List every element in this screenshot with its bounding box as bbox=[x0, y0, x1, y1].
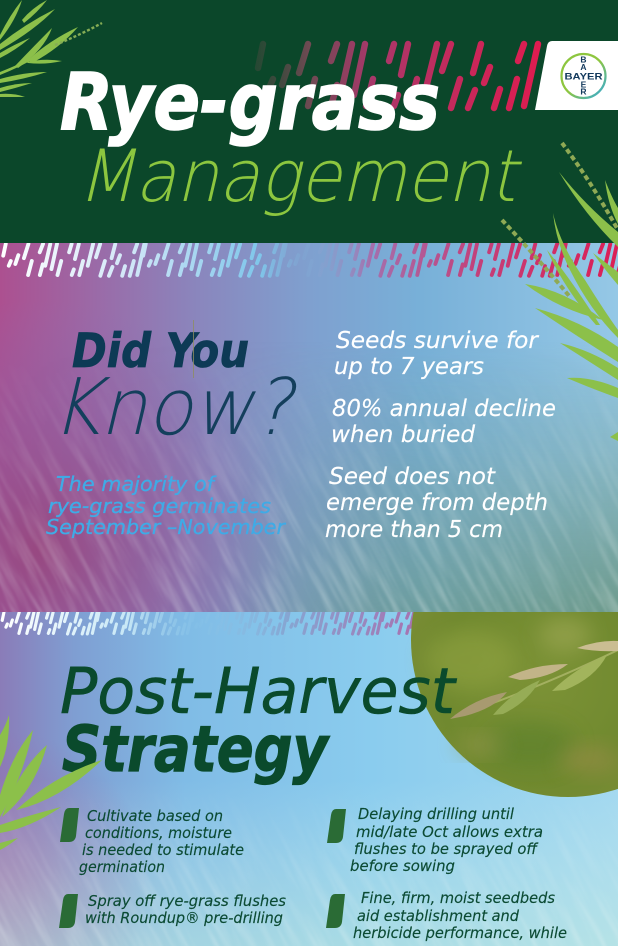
header dashes bbox=[258, 44, 538, 108]
icon: grass left bbox=[0, 715, 102, 850]
bullet: spray off bbox=[59, 892, 286, 928]
icon: Bayer cross logo: A bbox=[580, 62, 587, 72]
heading: Know?: Know? bbox=[51, 363, 297, 453]
title: Management: Management bbox=[77, 134, 522, 218]
bullet: cultivate bbox=[60, 807, 244, 876]
bullet: seedbeds: aid establishment and bbox=[357, 907, 519, 925]
bullet: cultivate: germination bbox=[79, 858, 165, 876]
bullet: delaying drilling: mid/late Oct allows extra bbox=[356, 823, 543, 841]
bullet: cultivate: Cultivate based on bbox=[87, 807, 223, 825]
bullet: seedbeds bbox=[326, 889, 567, 942]
icon: Bayer cross logo: E bbox=[581, 80, 587, 90]
bullet: delaying drilling: Delaying drilling until bbox=[358, 805, 515, 823]
text: annual decline bbox=[332, 398, 555, 442]
bullet: seedbeds: herbicide performance, while bbox=[353, 924, 567, 942]
text: annual decline: 80% annual decline bbox=[332, 396, 556, 422]
text: germination timing: The majority of bbox=[56, 472, 217, 496]
text: seed survival bbox=[334, 328, 540, 380]
icon: grass top left bbox=[0, 0, 102, 97]
text: seed survival: up to 7 years bbox=[334, 354, 484, 380]
bullet: delaying drilling: before sowing bbox=[350, 857, 455, 875]
icon: Bayer cross logo: B bbox=[580, 54, 587, 64]
grass texture bbox=[0, 842, 618, 946]
text: annual decline: when buried bbox=[331, 422, 475, 448]
panel: did you know bbox=[0, 243, 618, 612]
bullet: cultivate: is needed to stimulate bbox=[82, 841, 244, 859]
text: germination timing: September –November bbox=[46, 515, 287, 539]
title: Rye-grass: Rye-grass bbox=[60, 58, 440, 148]
dash strip: post-harvest bbox=[0, 612, 420, 636]
bullet: delaying drilling: flushes to be sprayed off bbox=[354, 840, 539, 858]
text: emergence depth: more than 5 cm bbox=[325, 517, 503, 543]
heading: Strategy: Strategy bbox=[62, 713, 331, 786]
grass texture bbox=[0, 410, 618, 612]
bullet: delaying drilling bbox=[327, 805, 543, 875]
photo: rye-grass seed head bbox=[411, 612, 618, 797]
text: emergence depth: Seed does not bbox=[329, 464, 496, 490]
text: germination timing: rye-grass germinates bbox=[48, 494, 271, 518]
panel: header bbox=[0, 0, 618, 243]
icon: grass top right bbox=[502, 143, 618, 441]
text: germination timing bbox=[46, 472, 287, 539]
logo plate bbox=[535, 41, 618, 110]
panel: post-harvest strategy bbox=[0, 612, 618, 946]
bullet: spray off: with Roundup® pre-drilling bbox=[85, 909, 283, 927]
heading: Did You: Did You bbox=[72, 324, 249, 379]
seed head bbox=[450, 641, 618, 719]
icon: Bayer cross logo: BAYER bbox=[564, 72, 603, 82]
icon: Bayer cross logo: R bbox=[580, 86, 587, 96]
text: seed survival: Seeds survive for bbox=[336, 328, 540, 354]
bullet: spray off: Spray off rye-grass flushes bbox=[88, 892, 286, 910]
icon: Bayer cross logo bbox=[562, 54, 606, 98]
heading: Post-Harvest: Post-Harvest bbox=[60, 655, 457, 728]
bullet: cultivate: conditions, moisture bbox=[85, 824, 232, 842]
dash strip: did you know bbox=[0, 243, 618, 279]
bullet: seedbeds: Fine, firm, moist seedbeds bbox=[361, 889, 555, 907]
text: emergence depth: emerge from depth bbox=[326, 490, 548, 516]
text: emergence depth bbox=[326, 466, 547, 538]
